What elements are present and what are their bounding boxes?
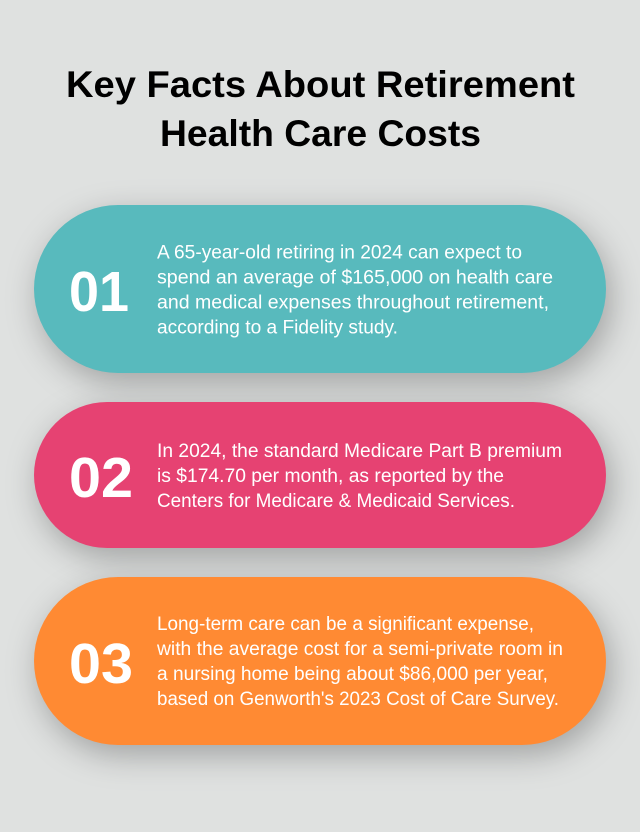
- text block: fact 02: [157, 441, 562, 512]
- title: Key Facts About Retirement: [66, 64, 575, 105]
- number 03: 03: [69, 632, 133, 696]
- text block: fact 01: [157, 242, 553, 338]
- text block: fact 01: spend an average of $165,000 on health care: [157, 268, 553, 288]
- number 02: 02: [69, 446, 133, 510]
- pill background: teal: [34, 205, 606, 373]
- pill background: pink: [34, 402, 606, 548]
- panel: fact 03: [34, 577, 606, 745]
- number 01: 01: [69, 260, 129, 324]
- text block: fact 01: and medical expenses throughout retirement,: [157, 292, 549, 314]
- panel: fact 02: [34, 402, 606, 548]
- pill background: orange: [34, 577, 606, 745]
- text block: fact 01: A 65-year-old retiring in 2024 can expect to: [157, 242, 522, 264]
- text block: fact 03: Long-term care can be a significant expense,: [157, 614, 534, 635]
- text block: fact 02: is $174.70 per month, as reported by the: [157, 466, 504, 487]
- title: Health Care Costs: [160, 113, 481, 154]
- title: [66, 64, 575, 154]
- text block: fact 03: [156, 614, 563, 710]
- text block: fact 03: based on Genworth's 2023 Cost of Care Survey.: [157, 689, 559, 710]
- text block: fact 01: according to a Fidelity study.: [157, 318, 398, 338]
- text block: fact 03: with the average cost for a semi-private room in: [156, 639, 563, 660]
- text block: fact 02: Centers for Medicare & Medicaid Services.: [157, 491, 515, 512]
- text block: fact 03: a nursing home being about $86,000 per year,: [157, 664, 548, 685]
- text block: fact 02: In 2024, the standard Medicare Part B premium: [157, 441, 562, 462]
- panel: fact 01: [34, 205, 606, 373]
